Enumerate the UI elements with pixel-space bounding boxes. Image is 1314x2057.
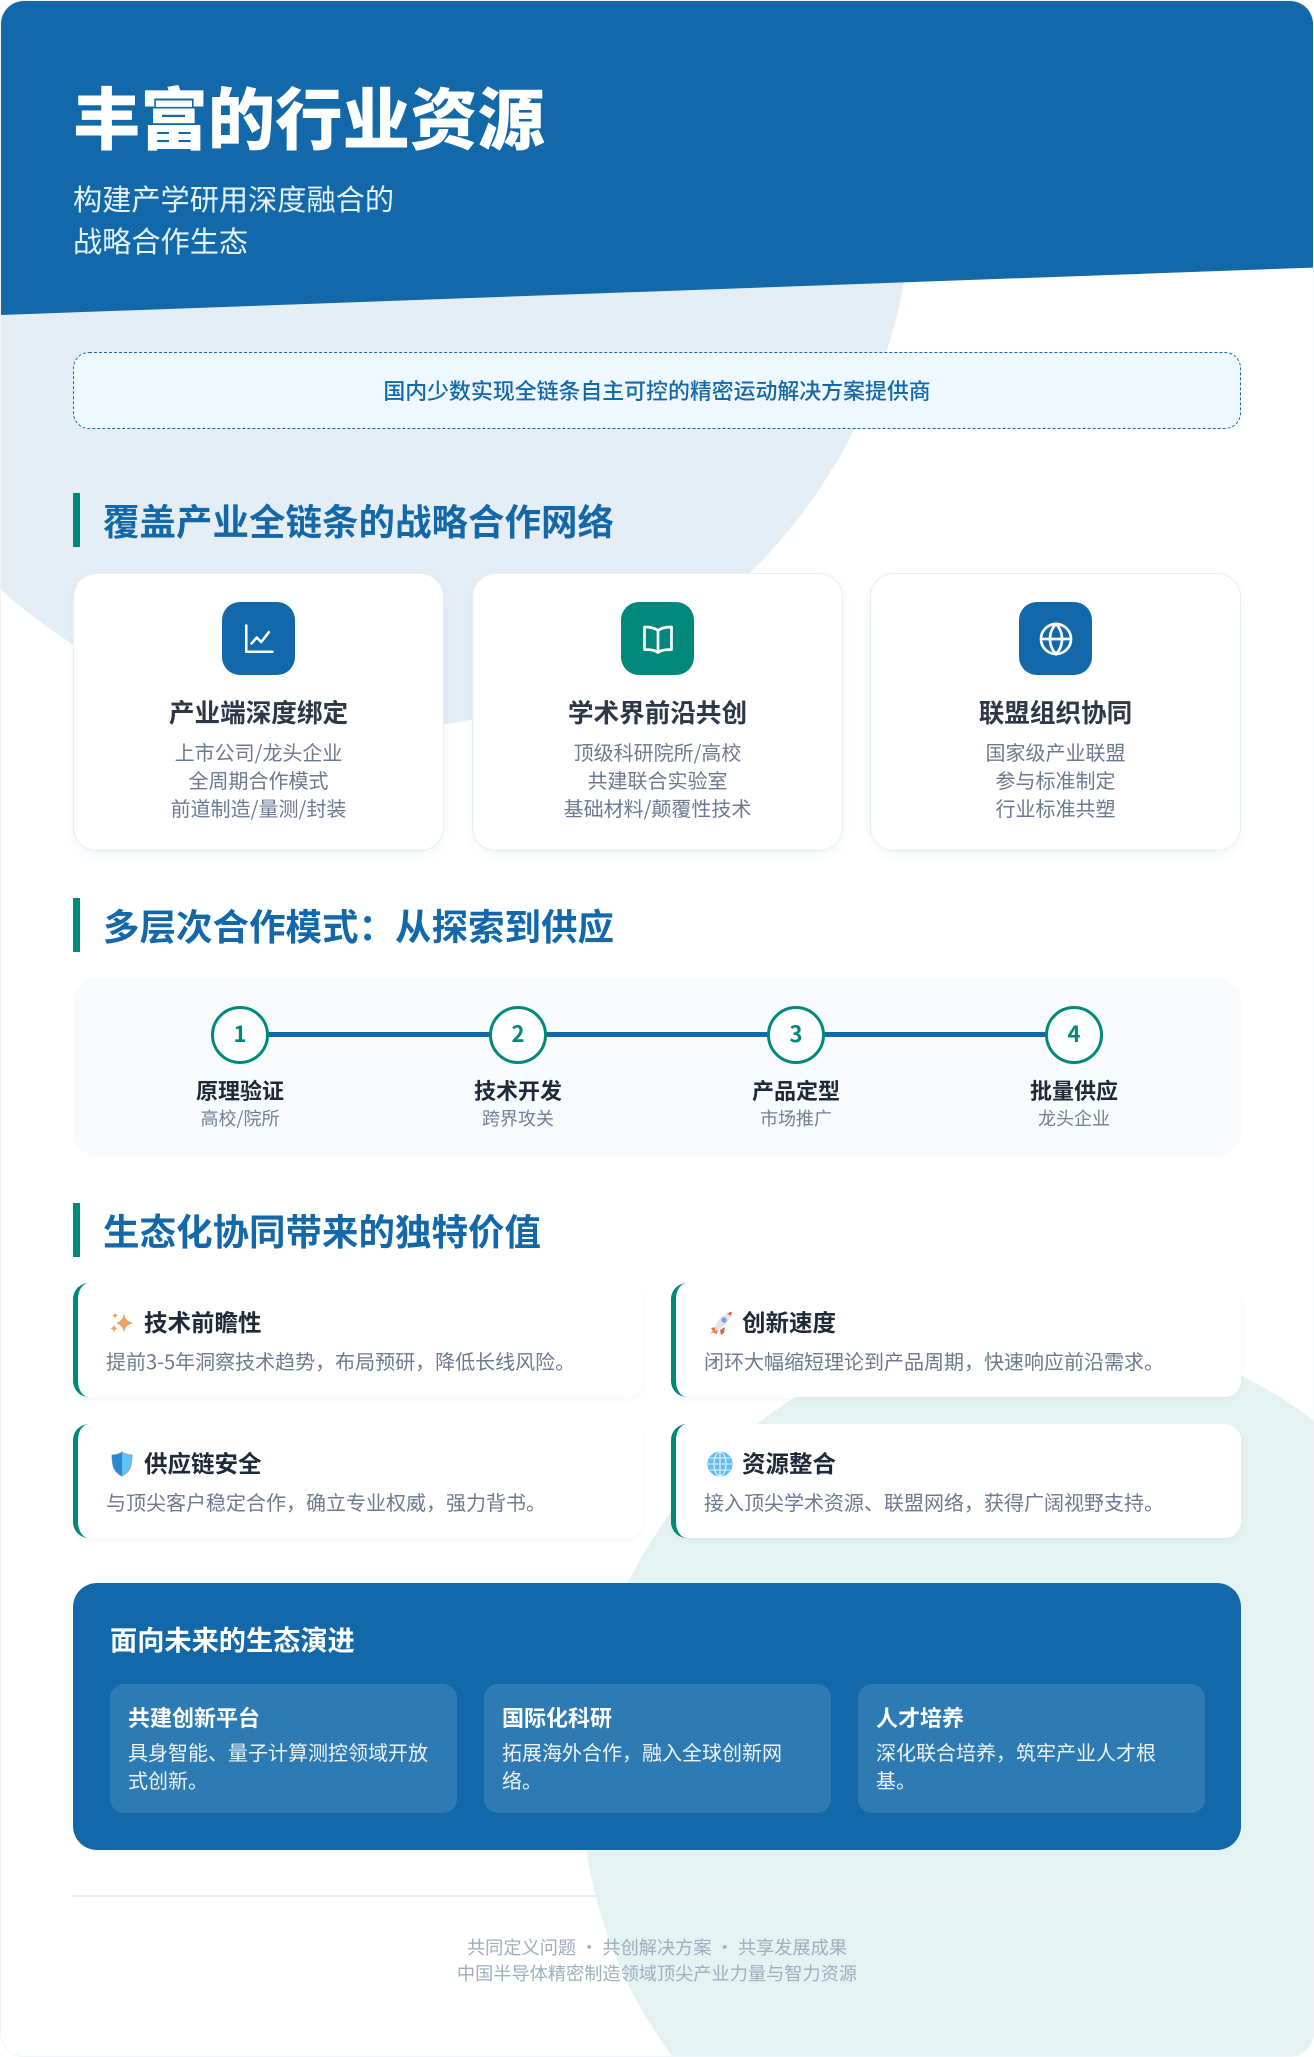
step number [767, 1006, 825, 1064]
step label: 原理验证 [196, 1074, 284, 1106]
card text: 闭环大幅缩短理论到产品周期，快速响应前沿需求。 [704, 1346, 1164, 1375]
card text: 与顶尖客户稳定合作，确立专业权威，强力背书。 [106, 1487, 546, 1516]
header band [1, 1, 1313, 315]
step label: 批量供应 [1030, 1074, 1118, 1106]
panel heading: 面向未来的生态演进 [110, 1618, 355, 1658]
card text: 顶级科研院所/高校 [574, 737, 741, 766]
card text: 接入顶尖学术资源、联盟网络，获得广阔视野支持。 [704, 1487, 1164, 1516]
title: 丰富的行业资源 [73, 67, 545, 164]
item text: 拓展海外合作，融入全球创新网络。 [502, 1737, 782, 1794]
step sublabel: 高校/院所 [200, 1105, 280, 1131]
card text: 参与标准制定 [996, 765, 1116, 794]
card text: 基础材料/颠覆性技术 [564, 793, 751, 822]
future item: talent [858, 1684, 1205, 1813]
step number [489, 1006, 547, 1064]
panel: future evolution [73, 1583, 1241, 1850]
footer text: 共同定义问题 · 共创解决方案 · 共享发展成果 [467, 1934, 847, 1960]
footer text [457, 1934, 857, 1986]
footer text: 中国半导体精密制造领域顶尖产业力量与智力资源 [457, 1960, 857, 1986]
step sublabel: 龙头企业 [1038, 1105, 1110, 1131]
item title: 国际化科研 [502, 1701, 612, 1733]
step label: 产品定型 [752, 1074, 840, 1106]
card title: 资源整合 [742, 1445, 836, 1479]
card text: 国家级产业联盟 [986, 737, 1126, 766]
card text [986, 737, 1126, 822]
banner callout [73, 352, 1241, 429]
item title: 人才培养 [876, 1701, 964, 1733]
panel: process timeline [73, 978, 1241, 1156]
step number: 2 [512, 1017, 524, 1049]
section heading: network [73, 493, 1241, 547]
panel: foresight [73, 1283, 643, 1397]
panel: supply chain security [73, 1424, 643, 1538]
subtitle [74, 185, 392, 255]
step sublabel: 跨界攻关 [482, 1105, 554, 1131]
step 2 [474, 1006, 562, 1131]
panel: industry card [73, 573, 444, 851]
panel: alliance card [870, 573, 1241, 851]
section heading: unique value [73, 1203, 1241, 1257]
step number: 4 [1068, 1017, 1080, 1049]
icon: open book [621, 602, 694, 675]
section heading: cooperation modes [73, 898, 1241, 952]
future item: platform [110, 1684, 457, 1813]
card text [171, 737, 346, 822]
panel: resource integration [671, 1424, 1241, 1538]
step number: 3 [790, 1017, 802, 1049]
card text: 共建联合实验室 [588, 765, 728, 794]
icon: rocket [710, 1312, 732, 1335]
item text: 深化联合培养，筑牢产业人才根基。 [876, 1737, 1156, 1794]
panel: academic card [472, 573, 843, 851]
icon: shield [112, 1452, 132, 1476]
card title: 供应链安全 [144, 1445, 262, 1479]
section heading: cooperation modes: 多层次合作模式：从探索到供应 [103, 898, 614, 951]
step 3 [752, 1006, 840, 1131]
card title: 创新速度 [742, 1304, 836, 1338]
icon: globe [1019, 602, 1092, 675]
item title: 共建创新平台 [128, 1701, 260, 1733]
step number: 1 [234, 1017, 246, 1049]
item text: 具身智能、量子计算测控领域开放式创新。 [128, 1737, 428, 1794]
connector line [240, 1032, 1075, 1037]
step sublabel: 市场推广 [760, 1105, 832, 1131]
step number [211, 1006, 269, 1064]
section heading: unique value: 生态化协同带来的独特价值 [103, 1203, 541, 1256]
step 1 [196, 1006, 284, 1131]
card text: 上市公司/龙头企业 [175, 737, 342, 766]
card title: 技术前瞻性 [144, 1304, 262, 1338]
subtitle: 构建产学研用深度融合的 [73, 177, 394, 219]
card text: 提前3-5年洞察技术趋势，布局预研，降低长线风险。 [106, 1346, 575, 1375]
step label: 技术开发 [474, 1074, 562, 1106]
card text: 全周期合作模式 [188, 765, 328, 794]
card text: 前道制造/量测/封装 [171, 793, 346, 822]
card title: 联盟组织协同 [979, 693, 1132, 730]
icon: line chart [222, 602, 295, 675]
icon: globe emoji [707, 1452, 732, 1476]
future item: international [484, 1684, 831, 1813]
panel: innovation speed [671, 1283, 1241, 1397]
card text [564, 737, 751, 822]
step number [1045, 1006, 1103, 1064]
section heading: network: 覆盖产业全链条的战略合作网络 [103, 493, 614, 546]
banner callout: 国内少数实现全链条自主可控的精密运动解决方案提供商 [383, 375, 931, 406]
subtitle: 战略合作生态 [73, 219, 248, 261]
card title: 学术界前沿共创 [568, 693, 747, 730]
card title: 产业端深度绑定 [169, 693, 348, 730]
card text: 行业标准共塑 [996, 793, 1116, 822]
icon: sparkles [110, 1312, 133, 1333]
step 4 [1030, 1006, 1118, 1131]
